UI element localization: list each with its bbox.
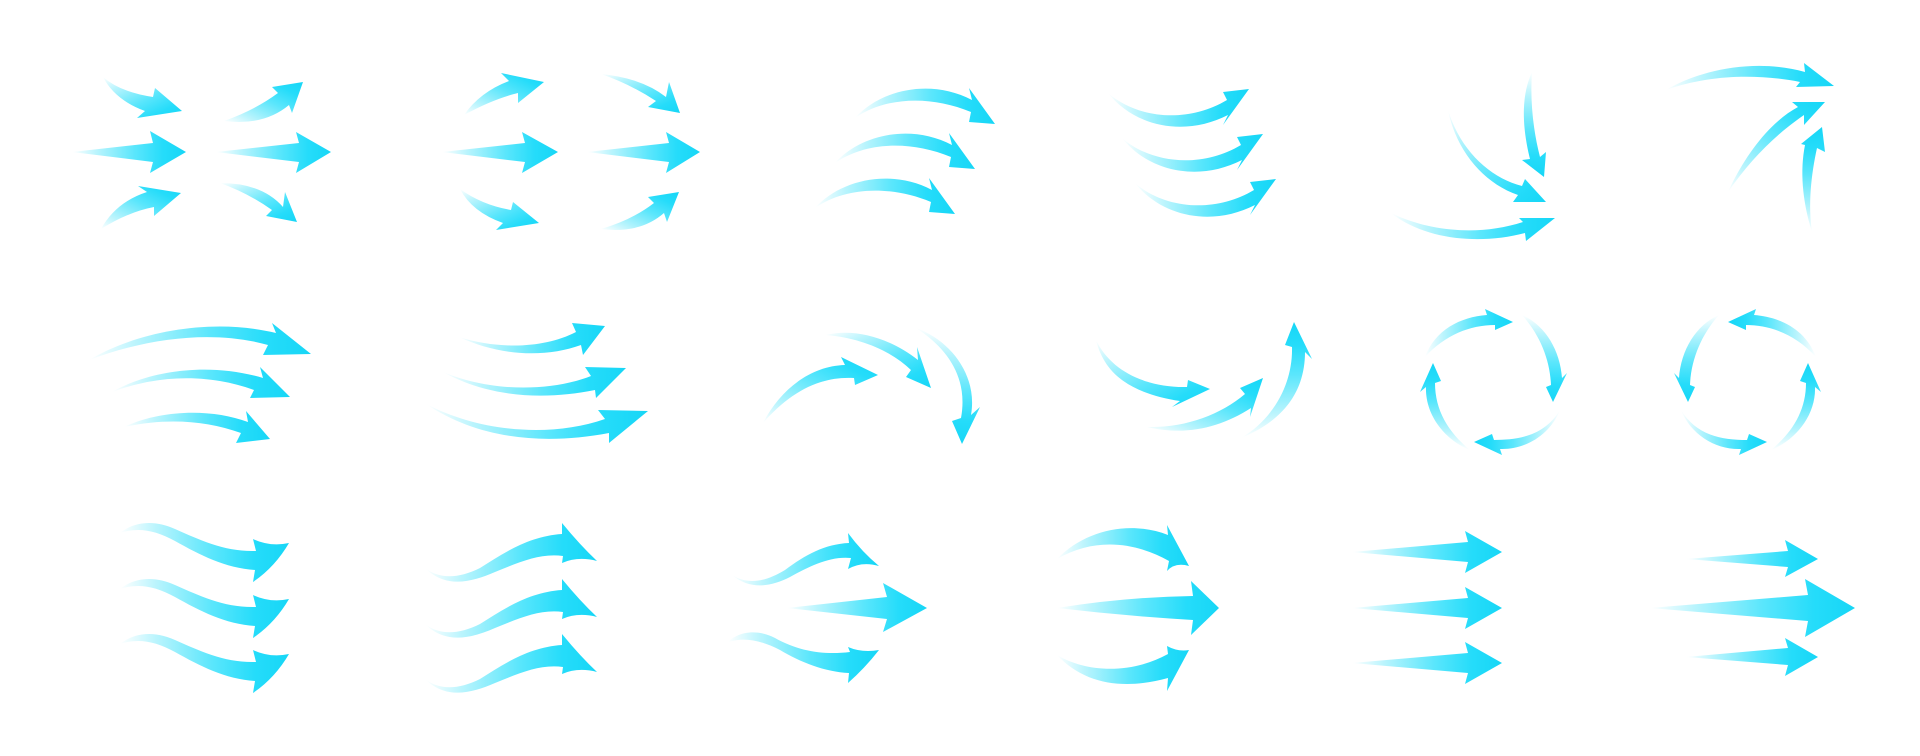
- arrow: middle left: [442, 132, 558, 173]
- arrow: lower left: [460, 189, 539, 230]
- arrow: bottom: [1135, 179, 1276, 217]
- arrow: rightward: [1666, 63, 1834, 90]
- icon set: three arrows turning clockwise: [763, 328, 980, 444]
- arrow: crest: [826, 333, 931, 388]
- arrow: top: [120, 523, 289, 582]
- arrow: upper right: [601, 74, 680, 113]
- icon set: six arrows converging, wide gap: [72, 77, 331, 229]
- arrow: lower right: [601, 192, 679, 230]
- arrow: middle: [1352, 587, 1502, 629]
- arrow: right: [1522, 315, 1567, 402]
- arrow: middle straight: [787, 583, 927, 632]
- icon set: three arrows fanning to upper right: [1666, 63, 1834, 232]
- arrow: bottom: [120, 634, 289, 693]
- arrow: rising: [763, 357, 878, 423]
- arrow: upper left: [103, 77, 182, 118]
- arrow: right: [1674, 315, 1719, 402]
- arrow: diagonal: [1728, 102, 1825, 192]
- arrow: falling: [1096, 340, 1210, 407]
- arrow: left: [1771, 363, 1821, 450]
- icon set: three arched arrows: [815, 88, 995, 214]
- arrow: middle right: [587, 132, 700, 173]
- arrow: upward: [1801, 127, 1825, 232]
- arrow: top: [855, 88, 995, 124]
- arrow: middle: [120, 579, 289, 638]
- icon set: large straight arrow between two small ones: [1650, 540, 1855, 676]
- arrow: rising: [1241, 322, 1312, 438]
- arrow: left: [1420, 363, 1470, 450]
- icon set: three arrows turning counter-clockwise: [1096, 322, 1312, 438]
- icon set: three upward curving arrows: [1108, 89, 1276, 217]
- arrow: middle left: [72, 131, 186, 173]
- arrow: top: [1352, 531, 1502, 573]
- icon set: curved arrows around a straight arrow: [1057, 525, 1219, 691]
- arrow: bottom: [1681, 410, 1767, 455]
- arrow: bottom: [1474, 410, 1560, 455]
- icon set: three long rising arrows: [426, 323, 648, 443]
- arrow: bottom: [425, 634, 597, 693]
- icon set: wavy arrows around a straight arrow: [728, 533, 927, 683]
- arrow: rightward: [1391, 213, 1555, 241]
- arrow: middle: [443, 367, 626, 398]
- icon set: three arrows converging to lower right: [1391, 72, 1555, 241]
- arrow: lower left: [101, 186, 181, 229]
- arrow: top curved: [1057, 525, 1189, 571]
- icon set: clockwise circle of four arrows: [1420, 309, 1567, 455]
- icon set: three ascending wavy arrows: [425, 523, 597, 693]
- icon set: three equal straight arrows: [1352, 531, 1502, 684]
- arrow: bottom: [124, 411, 270, 443]
- arrow: trough: [1147, 378, 1263, 431]
- arrow: downward: [1522, 72, 1546, 177]
- arrow: middle straight: [1057, 581, 1219, 635]
- arrow: upper right: [224, 82, 303, 122]
- arrow: middle: [112, 367, 290, 398]
- arrow: middle: [1122, 134, 1263, 172]
- arrow: top wavy: [732, 533, 879, 585]
- icon set: counter-clockwise circle of four arrows: [1674, 309, 1821, 455]
- arrow: top: [459, 323, 605, 355]
- arrow: bottom wavy: [728, 632, 879, 683]
- arrow: top: [425, 523, 597, 582]
- arrow: bottom: [426, 404, 648, 443]
- arrow: middle right: [216, 132, 331, 173]
- arrow: diagonal: [1448, 110, 1546, 202]
- arrow: top: [89, 323, 311, 360]
- icon set: six arrows diverging: [442, 73, 700, 230]
- arrow: bottom curved: [1057, 646, 1189, 691]
- icon set: three descending wavy arrows: [120, 523, 289, 693]
- arrow: top: [1728, 309, 1816, 357]
- arrow: falling: [916, 328, 980, 444]
- arrow: lower right: [220, 183, 297, 222]
- arrow: bottom: [815, 178, 955, 214]
- arrow: top small: [1686, 540, 1818, 577]
- arrow: middle: [835, 133, 975, 169]
- arrow: middle large: [1650, 579, 1855, 637]
- arrow: top: [1425, 309, 1513, 357]
- arrow: top: [1108, 89, 1249, 127]
- arrow: upper left: [464, 73, 544, 115]
- arrow: bottom: [1352, 642, 1502, 684]
- arrow: bottom small: [1686, 638, 1818, 676]
- arrow: middle: [425, 579, 597, 638]
- icon set: three long sweeping arrows: [89, 323, 311, 443]
